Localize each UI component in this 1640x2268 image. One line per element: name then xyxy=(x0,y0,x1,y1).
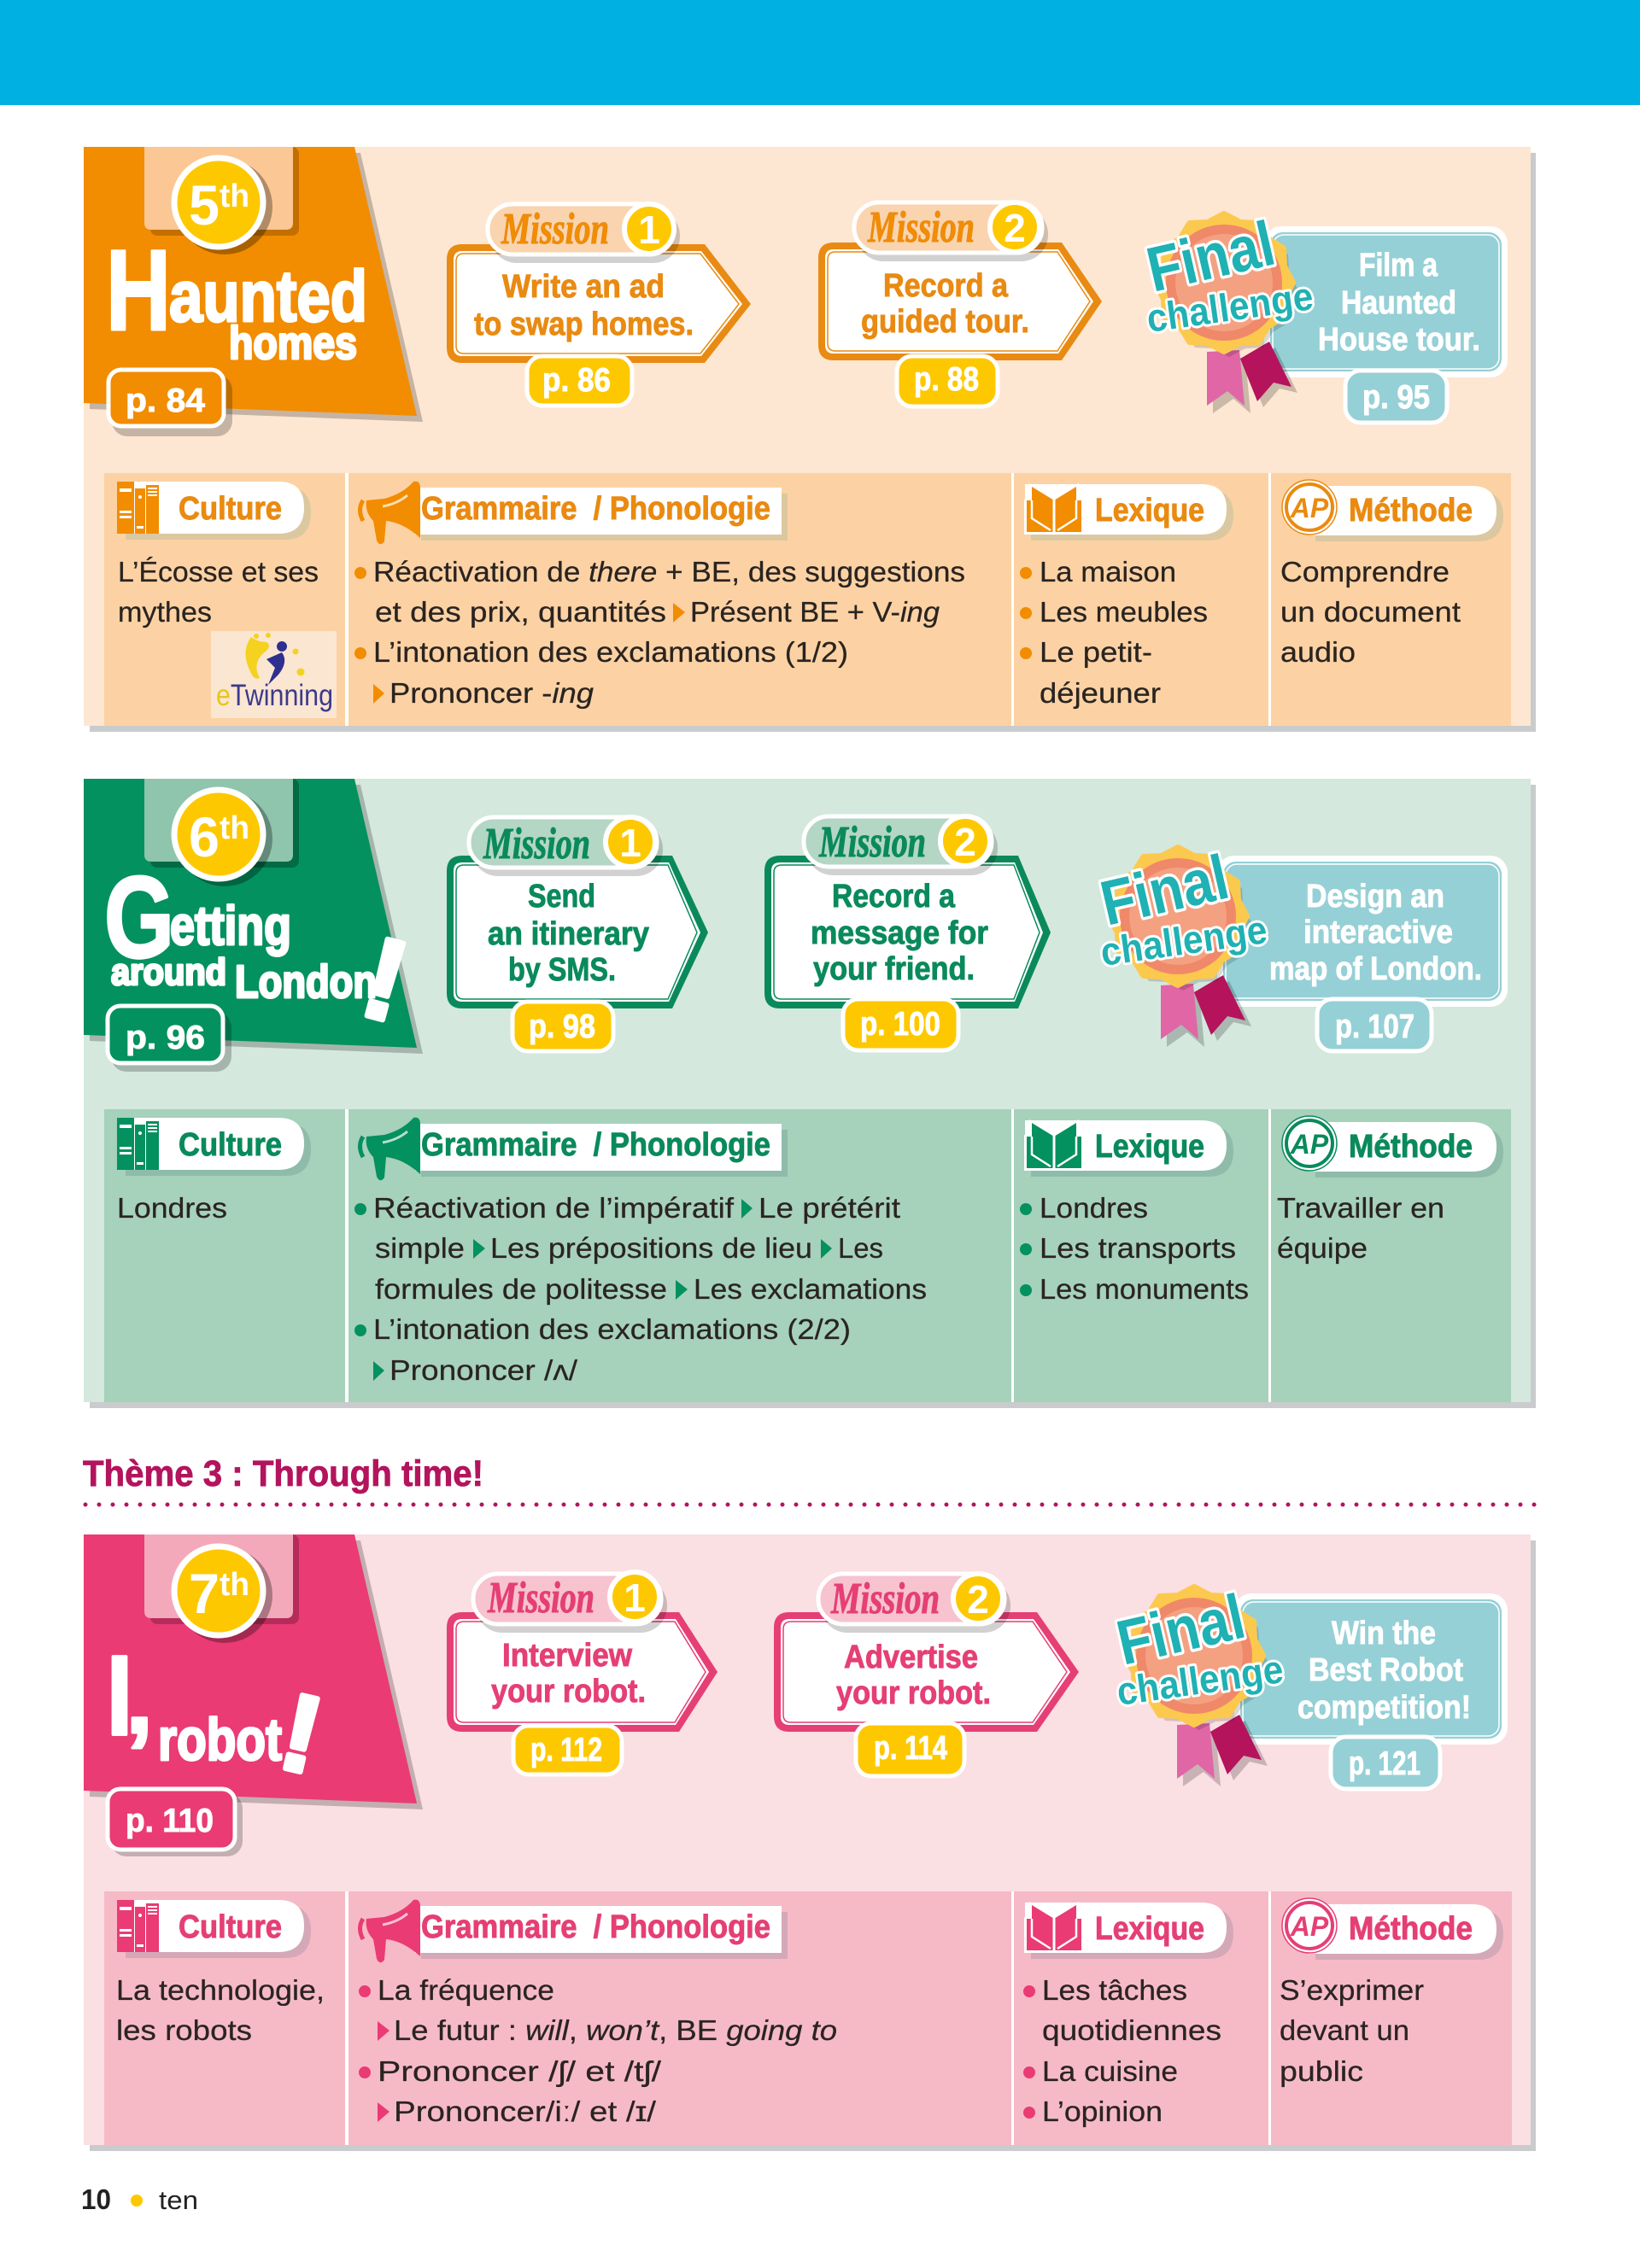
mission 2 arrow: p. 114 xyxy=(874,1730,947,1767)
lexique column: Londres xyxy=(1040,1192,1148,1224)
mission 1 arrow xyxy=(447,204,751,406)
grammar column: Le prétérit xyxy=(758,1192,900,1224)
grammar column: Grammaire / Phonologie xyxy=(421,1909,770,1945)
methode column: Méthode xyxy=(1349,1129,1473,1165)
mission 2 arrow: 2 xyxy=(1004,206,1026,250)
grammar column: Prononcer /ʌ/ xyxy=(390,1354,578,1386)
methode column: AP xyxy=(1290,1911,1329,1942)
mission 2 arrow: Mission xyxy=(830,1575,940,1623)
final challenge: map of London. xyxy=(1269,951,1482,987)
culture column: Londres xyxy=(117,1192,227,1224)
mission 2 arrow: Advertise xyxy=(844,1640,978,1675)
mission 2 arrow: Record a xyxy=(832,879,956,915)
banner: Getting around London: ! xyxy=(350,912,420,1047)
methode column: audio xyxy=(1280,636,1356,668)
banner: I, robot: , xyxy=(126,1643,153,1754)
mission 1 arrow xyxy=(447,1572,718,1774)
final challenge: House tour. xyxy=(1318,322,1480,358)
culture column: mythes xyxy=(118,596,212,628)
final challenge: challenge xyxy=(1098,907,1269,974)
lexique column: La cuisine xyxy=(1042,2055,1178,2087)
banner: Haunted homes: 5 xyxy=(189,173,220,237)
grammar column: Les xyxy=(838,1232,883,1264)
culture column: L’Écosse et ses xyxy=(118,556,319,587)
methode column: Méthode xyxy=(1349,493,1473,529)
grammar column: et des prix, quantités xyxy=(375,596,666,628)
culture column xyxy=(117,482,337,718)
grammar column: Grammaire / Phonologie xyxy=(421,1127,770,1163)
final challenge xyxy=(1094,841,1508,1051)
footer: page number: ten xyxy=(159,2185,198,2215)
grammar column: Les prépositions de lieu xyxy=(490,1232,812,1264)
lexique column: quotidiennes xyxy=(1042,2014,1221,2046)
banner: I, robot xyxy=(84,1534,423,1856)
mission 1 arrow: by SMS. xyxy=(508,952,616,988)
final challenge xyxy=(1110,1581,1508,1789)
mission 1 arrow: p. 86 xyxy=(542,362,611,399)
lexique column: Lexique xyxy=(1095,493,1204,529)
grammar column: Grammaire / Phonologie xyxy=(421,491,770,527)
mission 1 arrow: Send xyxy=(528,879,595,915)
culture column: Culture xyxy=(179,1909,282,1945)
grammar column: Le futur : will, won’t, BE going to xyxy=(394,2014,837,2046)
etwinning logo xyxy=(211,631,337,718)
etwinning logo: eTwinning xyxy=(216,679,333,712)
mission 2 arrow: your friend. xyxy=(813,951,975,987)
mission 1 arrow: Mission xyxy=(501,205,609,254)
mission 1 arrow: Write an ad xyxy=(502,269,665,305)
methode column: AP xyxy=(1290,493,1329,523)
mission 2 arrow: your robot. xyxy=(836,1675,991,1711)
footer: page number: 10 xyxy=(81,2183,111,2215)
grammar column: Réactivation de there + BE, des suggestions xyxy=(373,556,965,587)
methode column: Méthode xyxy=(1349,1911,1473,1947)
banner: I, robot: p. 110 xyxy=(126,1803,214,1839)
banner: Getting around London: 6 xyxy=(189,805,220,868)
mission 2 arrow: p. 88 xyxy=(914,361,979,398)
grammar column: Les exclamations xyxy=(694,1273,927,1305)
lexique column: Le petit- xyxy=(1040,636,1152,668)
final challenge: challenge xyxy=(1114,1646,1286,1714)
mission 2 arrow xyxy=(764,816,1051,1050)
banner: Getting around London xyxy=(84,779,423,1072)
banner: I, robot: I xyxy=(107,1633,132,1758)
final challenge: Best Robot xyxy=(1309,1652,1463,1688)
mission 1 arrow: 1 xyxy=(638,208,660,252)
mission 2 arrow: guided tour. xyxy=(861,304,1029,340)
grammar column: simple xyxy=(375,1232,465,1264)
banner: Haunted homes: p. 84 xyxy=(126,383,205,419)
table: unit 6 xyxy=(104,1109,1511,1402)
mission 2 arrow: 2 xyxy=(954,820,976,864)
table: unit 5 xyxy=(104,473,1511,726)
mission 1 arrow: to swap homes. xyxy=(474,307,694,342)
grammar column: L’intonation des exclamations (2/2) xyxy=(373,1313,851,1345)
final challenge xyxy=(1140,208,1508,423)
grammar column: Prononcer - ing xyxy=(390,677,594,709)
final challenge: p. 107 xyxy=(1335,1008,1414,1045)
methode column xyxy=(1277,1116,1503,1264)
banner: Getting around London: p. 96 xyxy=(126,1020,205,1056)
banner: I, robot: robot xyxy=(158,1706,282,1773)
final challenge: Haunted xyxy=(1341,285,1456,321)
panel: unit 7 I, robot! xyxy=(84,1534,1536,2151)
culture column: La technologie, xyxy=(116,1974,325,2006)
grammar column: Réactivation de l’impératif xyxy=(373,1192,735,1224)
panel: unit 5 Haunted homes xyxy=(84,147,1536,732)
mission 1 arrow: Interview xyxy=(502,1638,632,1674)
methode column: Travailler en xyxy=(1277,1192,1444,1224)
lexique column xyxy=(1020,483,1233,709)
lexique column: Les meubles xyxy=(1040,596,1208,628)
banner: Haunted homes: H xyxy=(106,227,171,354)
banner: Getting around London: London xyxy=(235,956,377,1008)
banner: Haunted homes: th xyxy=(220,178,249,214)
mission 2 arrow xyxy=(774,1574,1079,1776)
lexique column: Les monuments xyxy=(1040,1273,1249,1305)
methode column: Comprendre xyxy=(1280,556,1450,587)
banner: Haunted homes: aunted xyxy=(169,256,367,336)
grammar column: L’intonation des exclamations (1/2) xyxy=(373,636,848,668)
mission 2 arrow: message for xyxy=(811,915,988,951)
final challenge: Film a xyxy=(1359,248,1438,284)
mission 1 arrow: Mission xyxy=(487,1574,594,1622)
final challenge: challenge xyxy=(1144,273,1315,341)
methode column: un document xyxy=(1280,596,1461,628)
final challenge: p. 121 xyxy=(1349,1745,1420,1782)
footer: page number xyxy=(81,2183,198,2215)
culture column xyxy=(116,1900,325,2046)
mission 1 arrow: an itinerary xyxy=(488,916,649,952)
mission 2 arrow: Mission xyxy=(818,818,926,867)
grammar column xyxy=(354,1118,927,1386)
grammar column: formules de politesse xyxy=(375,1273,667,1305)
heading: theme 3: Thème 3 : Through time! xyxy=(83,1453,483,1494)
lexique column: Lexique xyxy=(1095,1129,1204,1165)
mission 1 arrow: your robot. xyxy=(491,1674,646,1710)
lexique column: La maison xyxy=(1040,556,1176,587)
culture column: Culture xyxy=(179,491,282,527)
grammar column xyxy=(354,482,965,709)
banner: Haunted homes: homes xyxy=(229,318,357,369)
grammar column: Présent BE + V- ing xyxy=(690,596,940,628)
final challenge: Win the xyxy=(1332,1616,1436,1651)
lexique column: déjeuner xyxy=(1040,677,1161,709)
lexique column: Les tâches xyxy=(1042,1974,1187,2006)
mission 1 arrow: p. 98 xyxy=(529,1008,595,1045)
mission 2 arrow: Mission xyxy=(867,203,975,252)
grammar column: La fréquence xyxy=(378,1974,554,2006)
grammar column: Prononcer /ʃ/ et /tʃ/ xyxy=(378,2055,662,2087)
culture column xyxy=(117,1118,311,1224)
mission 1 arrow: Mission xyxy=(483,820,590,868)
banner: Haunted homes xyxy=(84,147,423,436)
grammar column: Prononcer/iː/ et /ɪ/ xyxy=(394,2096,657,2127)
final challenge: Final xyxy=(1140,208,1281,306)
mission 1 arrow xyxy=(447,817,708,1051)
methode column: AP xyxy=(1290,1129,1329,1160)
panel: unit 6 Getting around London xyxy=(84,779,1536,1408)
lexique column: L’opinion xyxy=(1042,2096,1163,2127)
culture column: les robots xyxy=(116,2014,252,2046)
lexique column xyxy=(1023,1902,1233,2127)
banner: I, robot: th xyxy=(220,1567,249,1603)
mission 1 arrow: p. 112 xyxy=(530,1732,602,1768)
banner: Getting around London: th xyxy=(220,810,249,846)
banner: I, robot: ! xyxy=(270,1670,333,1797)
final challenge: Final xyxy=(1094,841,1235,939)
final challenge: Design an xyxy=(1306,879,1444,915)
table: unit 7 xyxy=(104,1891,1512,2145)
methode column: S’exprimer xyxy=(1280,1974,1424,2006)
mission 2 arrow: p. 100 xyxy=(860,1006,940,1043)
final challenge: interactive xyxy=(1303,915,1453,950)
methode column: équipe xyxy=(1277,1232,1368,1264)
top blue band xyxy=(0,0,1640,105)
mission 2 arrow xyxy=(818,202,1102,406)
mission 2 arrow: Record a xyxy=(883,268,1009,304)
grammar column xyxy=(359,1900,837,2127)
banner: I, robot: 7 xyxy=(189,1562,220,1625)
methode column: public xyxy=(1280,2055,1363,2087)
banner: Getting around London: G xyxy=(104,852,174,982)
methode column: devant un xyxy=(1280,2014,1409,2046)
mission 1 arrow: 1 xyxy=(619,821,641,865)
culture column: Culture xyxy=(179,1127,282,1163)
lexique column: Lexique xyxy=(1095,1911,1204,1947)
final challenge: p. 95 xyxy=(1362,379,1430,416)
lexique column: Les transports xyxy=(1040,1232,1236,1264)
mission 1 arrow: 1 xyxy=(624,1575,646,1620)
final challenge: competition! xyxy=(1297,1690,1471,1726)
lexique column xyxy=(1020,1119,1249,1305)
mission 2 arrow: 2 xyxy=(967,1577,989,1622)
methode column xyxy=(1280,480,1503,668)
final challenge: Final xyxy=(1110,1581,1251,1679)
banner: Getting around London: around xyxy=(111,951,226,993)
methode column xyxy=(1280,1898,1503,2087)
banner: Getting around London: etting xyxy=(170,895,291,956)
